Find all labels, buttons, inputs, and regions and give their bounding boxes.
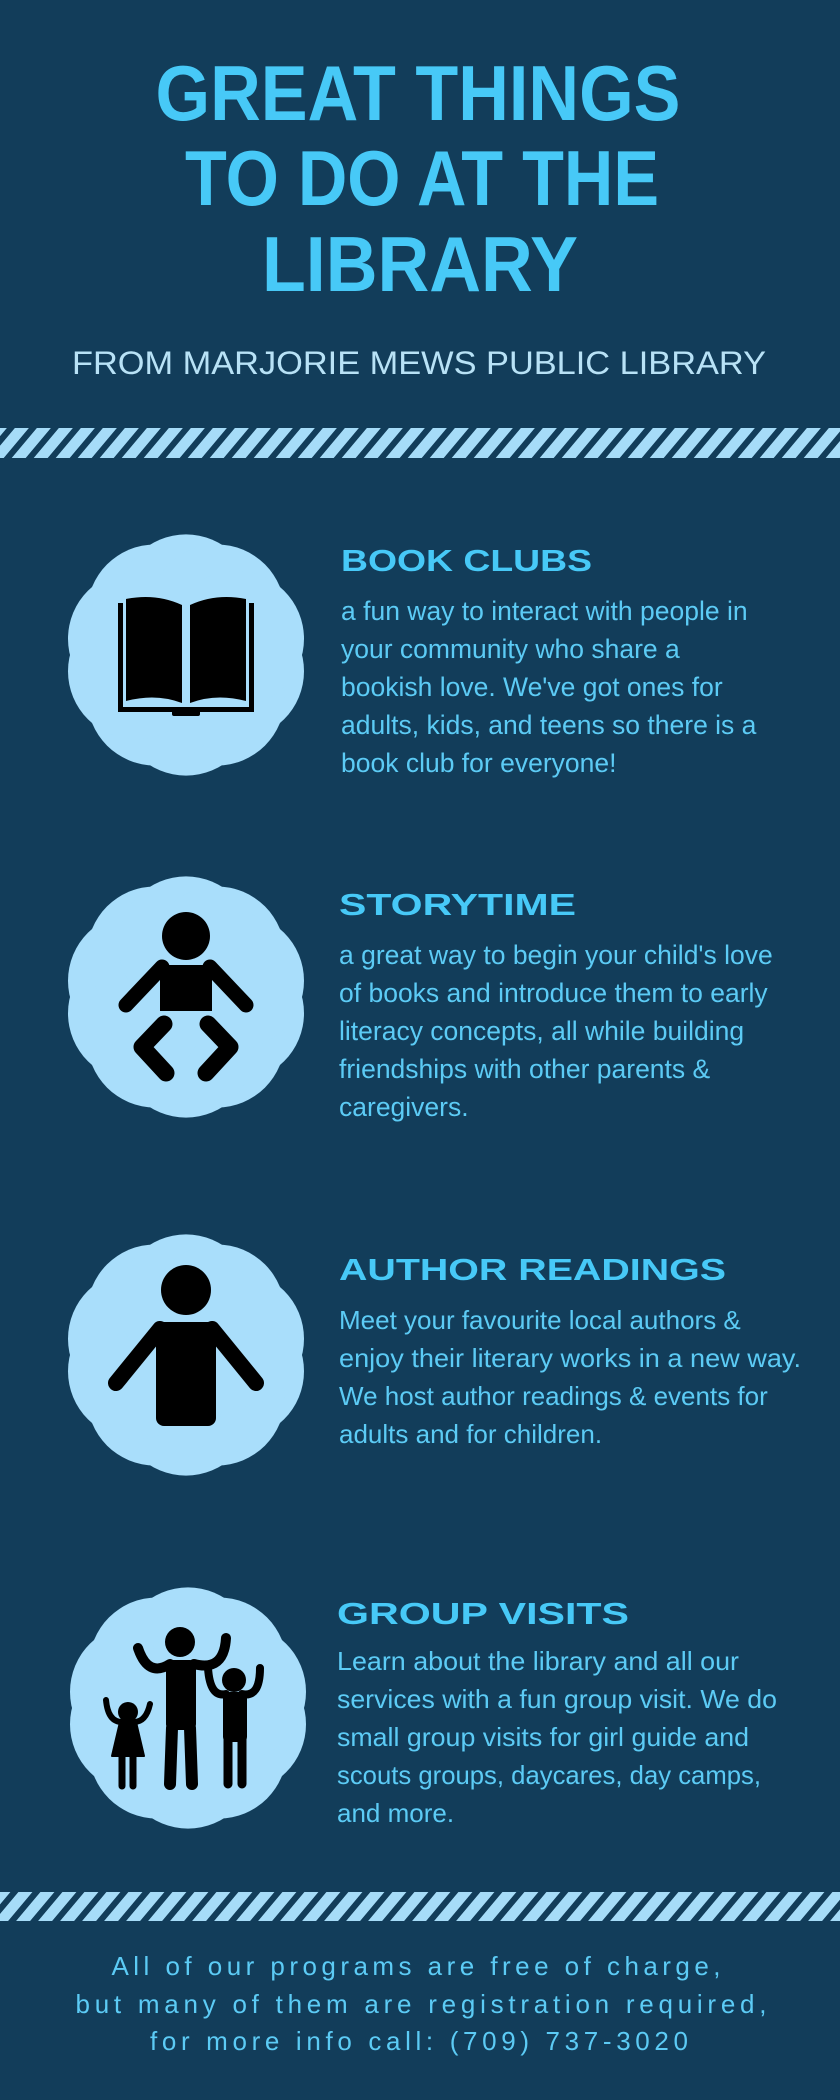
text: author readings: Meet your favourite local authors & bbox=[339, 1305, 741, 1335]
icon: person bbox=[116, 1265, 256, 1426]
text: author readings: We host author readings & events for bbox=[339, 1381, 768, 1411]
title: TO DO AT THE bbox=[185, 134, 659, 222]
badge: storytime bbox=[68, 876, 304, 1118]
text: book clubs: a fun way to interact with people in bbox=[341, 596, 748, 626]
text: group visits: scouts groups, daycares, day camps, bbox=[337, 1760, 761, 1790]
text: group visits bbox=[337, 1646, 777, 1828]
badge: author readings bbox=[68, 1234, 304, 1476]
heading: book clubs: BOOK CLUBS bbox=[341, 543, 592, 578]
heading: author readings: AUTHOR READINGS bbox=[339, 1252, 726, 1287]
section: book clubs bbox=[68, 534, 757, 778]
footer text: All of our programs are free of charge, bbox=[112, 1951, 720, 1981]
title bbox=[156, 49, 680, 308]
text: storytime: literacy concepts, all while building bbox=[339, 1016, 744, 1046]
icon: open book bbox=[118, 597, 254, 716]
title: LIBRARY bbox=[262, 220, 578, 308]
icon: group of people bbox=[106, 1627, 260, 1786]
section: storytime bbox=[68, 876, 773, 1122]
text: book clubs: book club for everyone! bbox=[341, 748, 616, 778]
text: book clubs: bookish love. We've got ones for bbox=[341, 672, 723, 702]
badge: book clubs bbox=[68, 534, 304, 776]
footer text: but many of them are registration required, bbox=[75, 1989, 767, 2019]
text: book clubs bbox=[341, 596, 757, 778]
footer text: for more info call: (709) 737-3020 bbox=[150, 2026, 688, 2056]
subtitle: FROM MARJORIE MEWS PUBLIC LIBRARY bbox=[72, 345, 766, 381]
text: storytime: a great way to begin your child's love bbox=[339, 940, 773, 970]
heading: group visits: GROUP VISITS bbox=[337, 1596, 629, 1631]
text: author readings: enjoy their literary works in a new way. bbox=[339, 1343, 801, 1373]
heading: storytime: STORYTIME bbox=[339, 887, 576, 922]
text: storytime: of books and introduce them to early bbox=[339, 978, 768, 1008]
stripe band bottom bbox=[0, 1892, 840, 1921]
stripe band top bbox=[0, 428, 840, 458]
title: GREAT THINGS bbox=[156, 49, 680, 137]
text: author readings bbox=[339, 1305, 801, 1449]
text: group visits: Learn about the library and all our bbox=[337, 1646, 739, 1676]
text: storytime bbox=[339, 940, 773, 1122]
text: book clubs: adults, kids, and teens so there is a bbox=[341, 710, 757, 740]
text: group visits: services with a fun group visit. We do bbox=[337, 1684, 777, 1714]
text: group visits: and more. bbox=[337, 1798, 454, 1828]
section: group visits bbox=[70, 1587, 777, 1829]
text: author readings: adults and for children. bbox=[339, 1419, 602, 1449]
text: book clubs: your community who share a bbox=[341, 634, 680, 664]
text: storytime: friendships with other parents & bbox=[339, 1054, 711, 1084]
text: group visits: small group visits for girl guide and bbox=[337, 1722, 749, 1752]
footer text bbox=[75, 1951, 767, 2056]
section: author readings bbox=[68, 1234, 801, 1476]
badge: group visits bbox=[70, 1587, 306, 1829]
icon: baby bbox=[126, 912, 246, 1073]
text: storytime: caregivers. bbox=[339, 1092, 469, 1122]
